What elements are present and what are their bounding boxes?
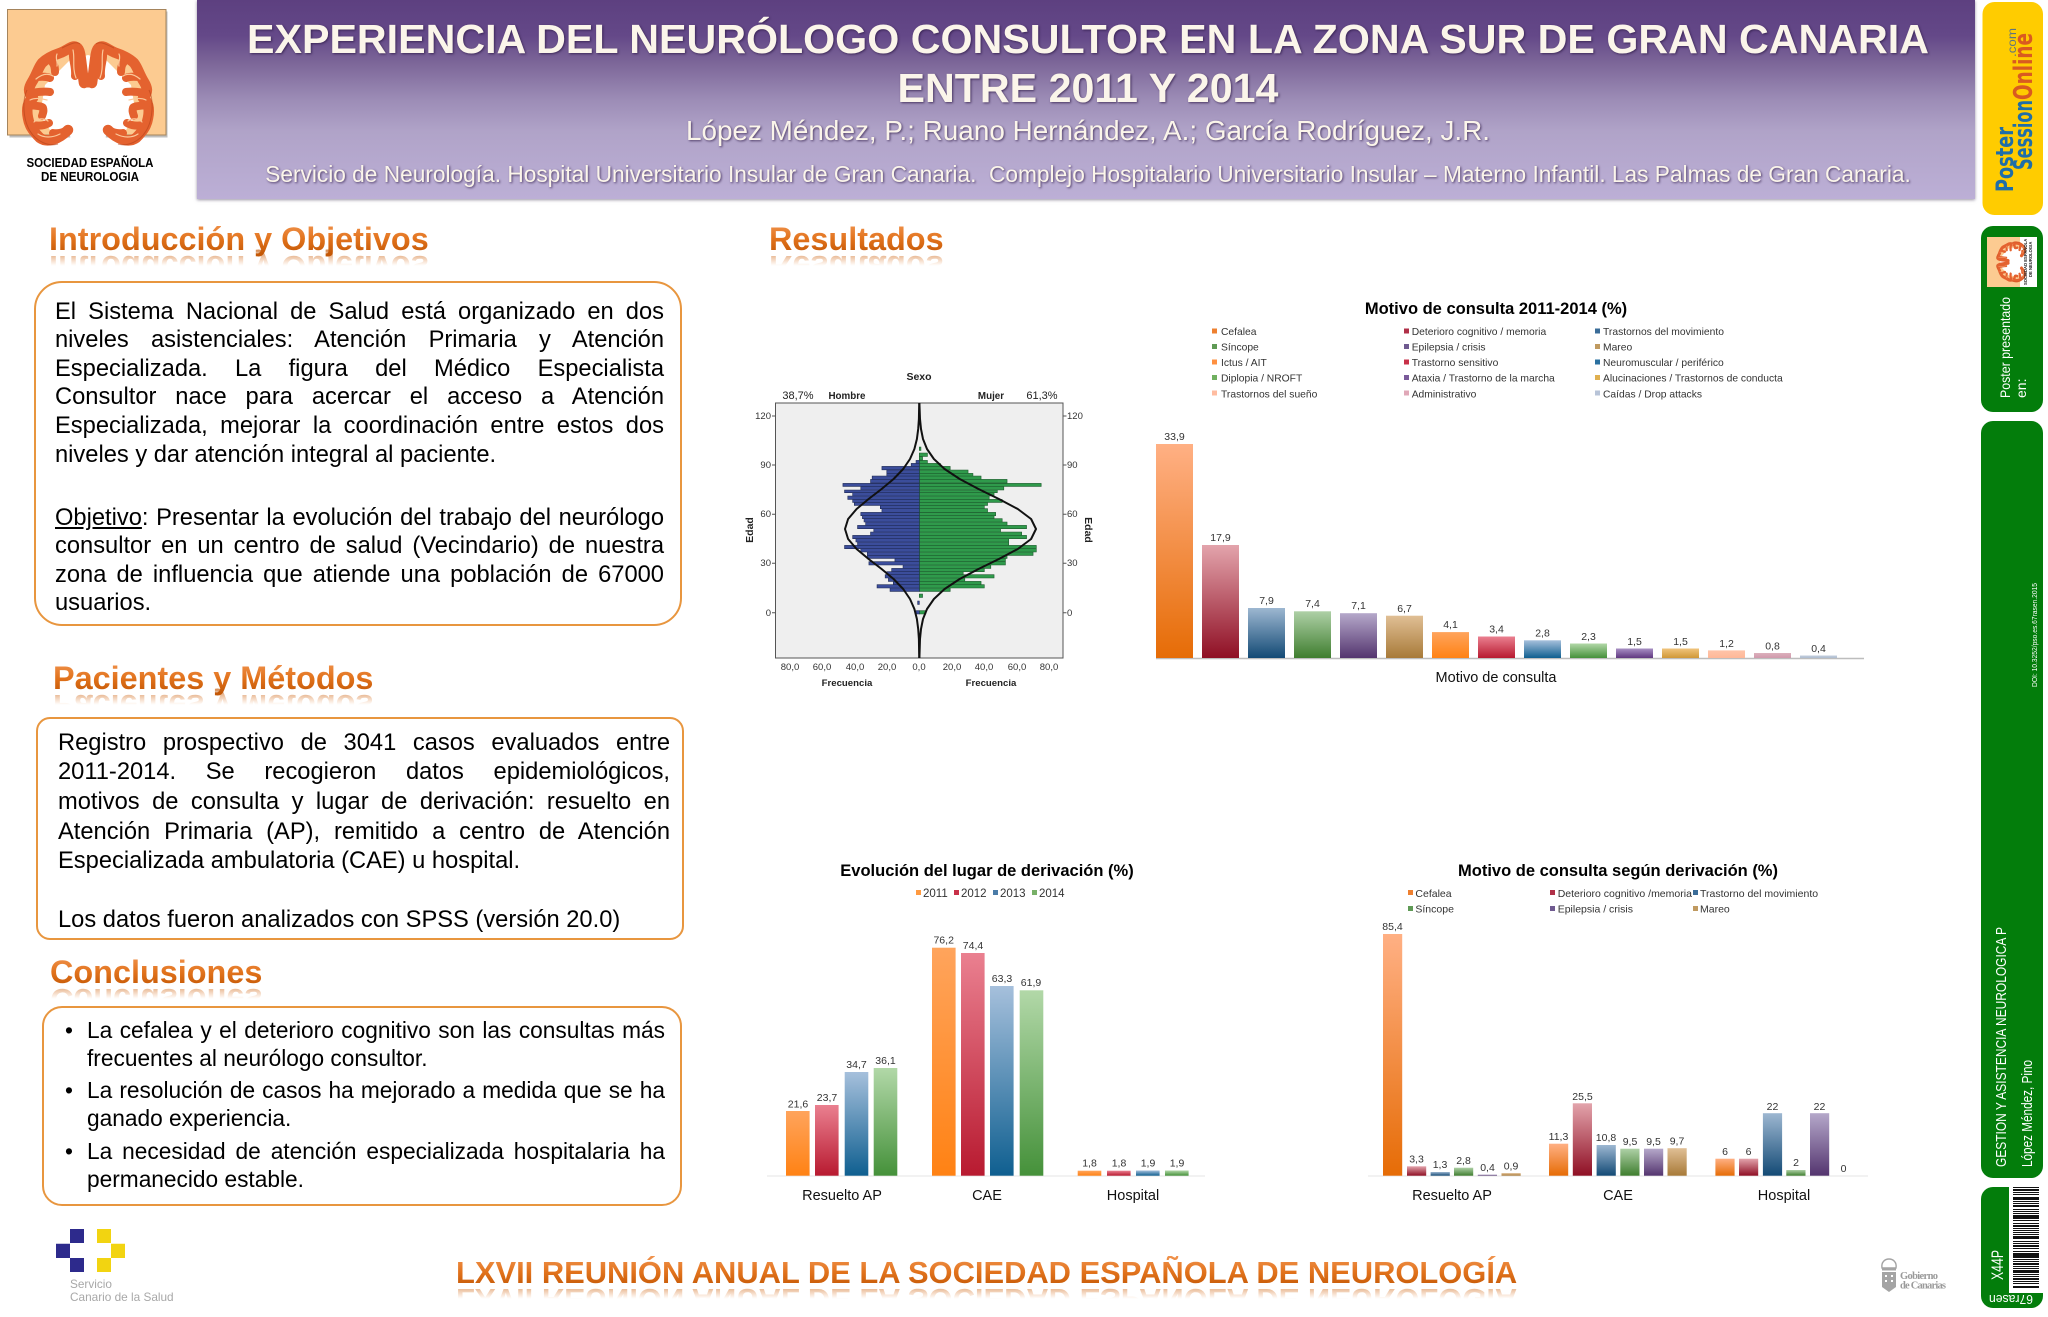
legend: Cefalea xyxy=(1221,327,1257,338)
panel: introducción xyxy=(34,281,682,626)
bullet 3: permanecido estable. xyxy=(87,1166,304,1192)
value labels: 21,6 xyxy=(788,1098,808,1110)
panel: ficha del póster: López Méndez, Pino xyxy=(2019,1060,2036,1167)
sex labels xyxy=(782,390,1058,402)
value labels: 1,9 xyxy=(1141,1158,1155,1170)
legend: Deterioro cognitivo /memoria xyxy=(1558,888,1692,900)
value labels: 63,3 xyxy=(992,973,1012,985)
frequency axis: 20,0 xyxy=(943,662,961,673)
affiliation: Servicio de Neurología. Hospital Universitario Insular de Gran Canaria. Complejo Hospitalario Universitario Insular – Materno Infantil. Las Palmas de Gran Canaria. xyxy=(265,161,1911,187)
left age axis: 90 xyxy=(760,460,771,471)
value labels: 7,1 xyxy=(1351,600,1366,612)
chart: pirámide por sexo y edad xyxy=(744,371,1094,689)
chart: motivo de consulta según derivación xyxy=(1368,862,1868,1204)
sex labels: 61,3% xyxy=(1026,390,1058,402)
panel: código de barras: X44P xyxy=(1988,1250,2007,1280)
value labels: 6 xyxy=(1746,1146,1752,1158)
right age axis: 30 xyxy=(1067,558,1078,569)
legend: Deterioro cognitivo / memoria xyxy=(1412,327,1546,338)
bars xyxy=(786,948,1189,1176)
authors: López Méndez, P.; Ruano Hernández, A.; García Rodríguez, J.R. xyxy=(686,115,1490,146)
legend xyxy=(1212,327,1783,400)
value labels: 1,8 xyxy=(1082,1158,1097,1170)
value labels: 11,3 xyxy=(1549,1131,1568,1143)
value labels: 3,3 xyxy=(1409,1154,1424,1166)
value labels: 1,5 xyxy=(1673,636,1688,648)
panel: pacientes y métodos: Registro prospectivo de 3041 casos evaluados entre xyxy=(58,730,670,756)
title line 1: EXPERIENCIA DEL NEURÓLOGO CONSULTOR EN LA ZONA SUR DE GRAN CANARIA xyxy=(247,16,1929,62)
bullet 1: frecuentes al neurólogo consultor. xyxy=(87,1044,428,1070)
value labels: 74,4 xyxy=(963,940,983,952)
bullet 2: ganado experiencia. xyxy=(87,1105,291,1131)
panel: pacientes y métodos: Especializada ambulatoria (CAE) u hospital. xyxy=(58,848,520,874)
value labels: 23,7 xyxy=(817,1092,837,1104)
male bars xyxy=(843,460,919,614)
value labels: 9,5 xyxy=(1623,1136,1637,1148)
right age axis xyxy=(1063,411,1083,619)
chart: evolución del lugar de derivación xyxy=(767,862,1205,1204)
panel: introducción: niveles asistenciales: Atención Primaria y Atención xyxy=(55,327,664,353)
logo: Sociedad Española de Neurología: SOCIEDAD ESPAÑOLA xyxy=(26,155,154,170)
legend: Caídas / Drop attacks xyxy=(1603,389,1702,400)
panel: Poster presentado en: DE NEUROLOGIA xyxy=(2028,242,2033,277)
value labels: 22 xyxy=(1767,1101,1778,1113)
value labels: 1,9 xyxy=(1170,1158,1184,1170)
value labels: 2,8 xyxy=(1535,628,1550,640)
logo: Sociedad Española de Neurología: DE NEUROLOGIA xyxy=(41,169,140,184)
value labels: 25,5 xyxy=(1572,1091,1593,1103)
right age axis: 0 xyxy=(1067,608,1072,619)
plot area xyxy=(776,403,1063,658)
legend: Ictus / AIT xyxy=(1221,358,1267,369)
panel: Poster presentado en: Poster presentado xyxy=(1997,297,2013,398)
right age axis: 60 xyxy=(1067,509,1078,520)
panel: introducción: Especializada, mejorar la coordinación entre estos dos xyxy=(55,413,664,439)
icon: small brain xyxy=(1997,242,2028,282)
legend: Mareo xyxy=(1700,904,1730,916)
panel: ficha del póster: GESTION Y ASISTENCIA NEUROLOGICA P xyxy=(1993,927,2010,1167)
panel: introducción: consultor en un centro de salud (Vecindario) de nuestra xyxy=(55,533,664,559)
panel: Poster Session Online: Session xyxy=(2009,100,2039,170)
legend: Ataxia / Trastorno de la marcha xyxy=(1412,374,1555,385)
legend: Síncope xyxy=(1221,343,1259,354)
panel: introducción: Especializada. La figura del Médico Especialista xyxy=(55,356,664,382)
category labels xyxy=(1412,1188,1810,1204)
value labels xyxy=(1164,431,1826,655)
value labels: 85,4 xyxy=(1382,921,1403,933)
sex labels: 38,7% xyxy=(782,390,814,402)
value labels: 22 xyxy=(1814,1101,1825,1113)
heading: Conclusiones: Conclusiones xyxy=(50,954,262,990)
bullet 3: La necesidad de atención especializada hospitalaria ha xyxy=(87,1138,665,1164)
legend: Cefalea xyxy=(1415,888,1452,900)
category labels: CAE xyxy=(1603,1188,1633,1204)
value labels: 7,4 xyxy=(1305,598,1320,610)
frequency axis: 20,0 xyxy=(878,662,896,673)
x axis title: Motivo de consulta xyxy=(1436,670,1557,686)
panel: introducción: zona de influencia que atiende una población de 67000 xyxy=(55,562,664,588)
category labels: Hospital xyxy=(1107,1188,1159,1204)
value labels: 1,5 xyxy=(1627,636,1642,648)
panel: Poster Session Online: .com xyxy=(2005,28,2019,57)
value labels: 2,8 xyxy=(1456,1155,1471,1167)
frequency axis: 40,0 xyxy=(846,662,864,673)
value labels: 61,9 xyxy=(1021,977,1041,989)
panel: introducción: Objetivo: Presentar la evolución del trabajo del neurólogo xyxy=(55,505,664,531)
legend: Síncope xyxy=(1415,904,1454,916)
panel: pacientes y métodos xyxy=(36,717,684,940)
panel: introducción: usuarios. xyxy=(55,590,151,616)
panel: código de barras xyxy=(1981,1187,2043,1308)
value labels: 9,7 xyxy=(1670,1136,1684,1148)
frequency axis: 40,0 xyxy=(975,662,993,673)
legend: Neuromuscular / periférico xyxy=(1603,358,1724,369)
right age axis: 120 xyxy=(1067,411,1083,422)
category labels: Resuelto AP xyxy=(802,1188,882,1204)
value labels: 1,8 xyxy=(1112,1158,1126,1170)
value labels: 0,4 xyxy=(1811,643,1826,655)
value labels: 9,5 xyxy=(1646,1136,1661,1148)
legend: Trastornos del sueño xyxy=(1221,389,1318,400)
panel: Poster presentado en: en: xyxy=(2013,379,2029,398)
panel: Poster presentado en: SOCIEDAD ESPAÑOLA xyxy=(2023,239,2028,285)
heading: Resultados: Resultados xyxy=(769,221,944,257)
panel: introducción: niveles y dar atención integral al paciente. xyxy=(55,442,496,468)
value labels: 2 xyxy=(1793,1157,1799,1169)
axis titles: Edad xyxy=(744,517,756,543)
value labels xyxy=(1382,921,1847,1175)
panel: Poster presentado en xyxy=(1981,226,2043,412)
frequency axis: 0,0 xyxy=(912,662,926,673)
category labels: Hospital xyxy=(1758,1188,1810,1204)
header banner xyxy=(197,0,1975,199)
legend: 2014 xyxy=(1039,888,1065,900)
panel: introducción: El Sistema Nacional de Salud está organizado en dos xyxy=(55,299,664,325)
value labels: 33,9 xyxy=(1164,431,1185,443)
heading: Introducción y Objetivos: Introducción y Objetivos xyxy=(49,221,429,257)
value labels: 0 xyxy=(1841,1163,1847,1175)
legend: Trastorno del movimiento xyxy=(1700,888,1818,900)
value labels: 0,8 xyxy=(1765,640,1780,652)
female bars xyxy=(919,447,1041,614)
chart title: Evolución del lugar de derivación (%) xyxy=(840,862,1134,880)
logo: Servicio Canario de la Salud xyxy=(56,1229,174,1304)
baseline xyxy=(1156,658,1864,660)
value labels: 76,2 xyxy=(933,934,954,946)
left age axis: 120 xyxy=(755,411,771,422)
logo: Gobierno de Canarias: de Canarias xyxy=(1900,1280,1946,1292)
left age axis: 0 xyxy=(766,608,771,619)
bullet 3 xyxy=(87,1136,665,1192)
legend: Diplopia / NROFT xyxy=(1221,374,1303,385)
left age axis xyxy=(755,411,776,619)
axis titles: Edad xyxy=(1082,517,1094,543)
value labels: 3,4 xyxy=(1489,624,1504,636)
frequency axis: 80,0 xyxy=(781,662,799,673)
value labels: 34,7 xyxy=(846,1059,867,1071)
baseline xyxy=(1368,1175,1868,1177)
panel: código de barras: 67rasen xyxy=(1989,1292,2033,1307)
frequency axis: 60,0 xyxy=(1008,662,1026,673)
panel: introducción: Consultor nace para acercar el acceso a Atención xyxy=(55,384,664,410)
chart: motivo de consulta 2011-2014 xyxy=(1156,300,1864,686)
value labels: 10,8 xyxy=(1596,1132,1616,1144)
value labels: 1,3 xyxy=(1433,1159,1447,1171)
baseline xyxy=(767,1175,1205,1177)
legend xyxy=(1408,888,1818,916)
sex labels: Hombre xyxy=(828,391,866,402)
title line 2: ENTRE 2011 Y 2014 xyxy=(898,65,1278,111)
bullet 1: La cefalea y el deterioro cognitivo son las consultas más xyxy=(87,1016,665,1042)
legend: 2011 xyxy=(923,888,948,900)
value labels: 2,3 xyxy=(1581,631,1596,643)
panel: Poster Session Online: Poster xyxy=(1991,127,2019,192)
frequency axis xyxy=(781,662,1058,673)
panel: ficha del póster xyxy=(1981,421,2043,1178)
frequency axis: 80,0 xyxy=(1040,662,1058,673)
chart title: Sexo: Sexo xyxy=(906,371,932,383)
legend: 2012 xyxy=(961,888,987,900)
legend: Mareo xyxy=(1603,343,1632,354)
legend xyxy=(916,888,1065,900)
value labels: 6 xyxy=(1722,1146,1728,1158)
legend: Trastornos del movimiento xyxy=(1603,327,1724,338)
axis titles: Frecuencia xyxy=(822,678,873,689)
panel: pacientes y métodos: 2011-2014. Se recogieron datos epidemiológicos, xyxy=(58,759,670,785)
value labels: 4,1 xyxy=(1443,619,1458,631)
bullet 2 xyxy=(87,1076,665,1132)
bullet 1 xyxy=(87,1016,665,1072)
panel: conclusiones xyxy=(42,1006,682,1206)
logo: Servicio Canario de la Salud: Servicio xyxy=(70,1277,112,1291)
panel: Poster Session Online: Online xyxy=(2009,33,2039,100)
panel: Poster Session Online xyxy=(1982,2,2043,215)
value labels: 0,4 xyxy=(1480,1162,1495,1174)
left age axis: 30 xyxy=(760,558,771,569)
legend: Epilepsia / crisis xyxy=(1558,904,1633,916)
axis titles: Frecuencia xyxy=(966,678,1017,689)
bullet 2: La resolución de casos ha mejorado a medida que se ha xyxy=(87,1077,665,1103)
panel: pacientes y métodos: Los datos fueron analizados con SPSS (versión 20.0) xyxy=(58,907,620,933)
category labels xyxy=(802,1188,1159,1204)
sidebar xyxy=(1981,2,2043,1308)
value labels: 0,9 xyxy=(1504,1160,1518,1172)
value labels: 36,1 xyxy=(875,1055,896,1067)
bars xyxy=(1156,444,1837,658)
sex labels: Mujer xyxy=(978,391,1004,402)
logo: Servicio Canario de la Salud: Canario de la Salud xyxy=(70,1290,174,1304)
legend: Administrativo xyxy=(1412,389,1477,400)
value labels: 1,2 xyxy=(1719,638,1734,650)
category labels: Resuelto AP xyxy=(1412,1188,1492,1204)
panel: pacientes y métodos: Atención Primaria (AP), remitido a centro de Atención xyxy=(58,819,670,845)
category labels: CAE xyxy=(972,1188,1002,1204)
frequency axis: 60,0 xyxy=(813,662,831,673)
legend: Epilepsia / crisis xyxy=(1412,343,1486,354)
panel: pacientes y métodos: motivos de consulta y lugar de derivación: resuelto en xyxy=(58,789,670,815)
legend: 2013 xyxy=(1000,888,1026,900)
axis titles xyxy=(744,517,1094,689)
chart title: Motivo de consulta 2011-2014 (%) xyxy=(1365,300,1627,318)
value labels: 17,9 xyxy=(1210,532,1231,544)
logo: Sociedad Española de Neurología xyxy=(7,9,168,184)
logo: Gobierno de Canarias: Gobierno xyxy=(1900,1271,1938,1282)
heading: Pacientes y Métodos: Pacientes y Métodos xyxy=(53,660,373,696)
normal curves xyxy=(845,403,1036,658)
value labels xyxy=(788,934,1184,1170)
bars xyxy=(1383,934,1829,1176)
footer title: LXVII REUNIÓN ANUAL DE LA SOCIEDAD ESPAÑOLA DE NEUROLOGÍA xyxy=(456,1255,1517,1290)
left age axis: 60 xyxy=(760,509,771,520)
legend: Alucinaciones / Trastornos de conducta xyxy=(1603,374,1783,385)
value labels: 6,7 xyxy=(1397,603,1412,615)
legend: Trastorno sensitivo xyxy=(1412,358,1499,369)
right age axis: 90 xyxy=(1067,460,1078,471)
panel: ficha del póster: DOI: 10.3252/pso.es.67rasen.2015 xyxy=(2032,583,2039,687)
value labels: 7,9 xyxy=(1259,595,1274,607)
chart title: Motivo de consulta según derivación (%) xyxy=(1458,862,1778,880)
logo: Gobierno de Canarias xyxy=(1881,1258,1946,1292)
